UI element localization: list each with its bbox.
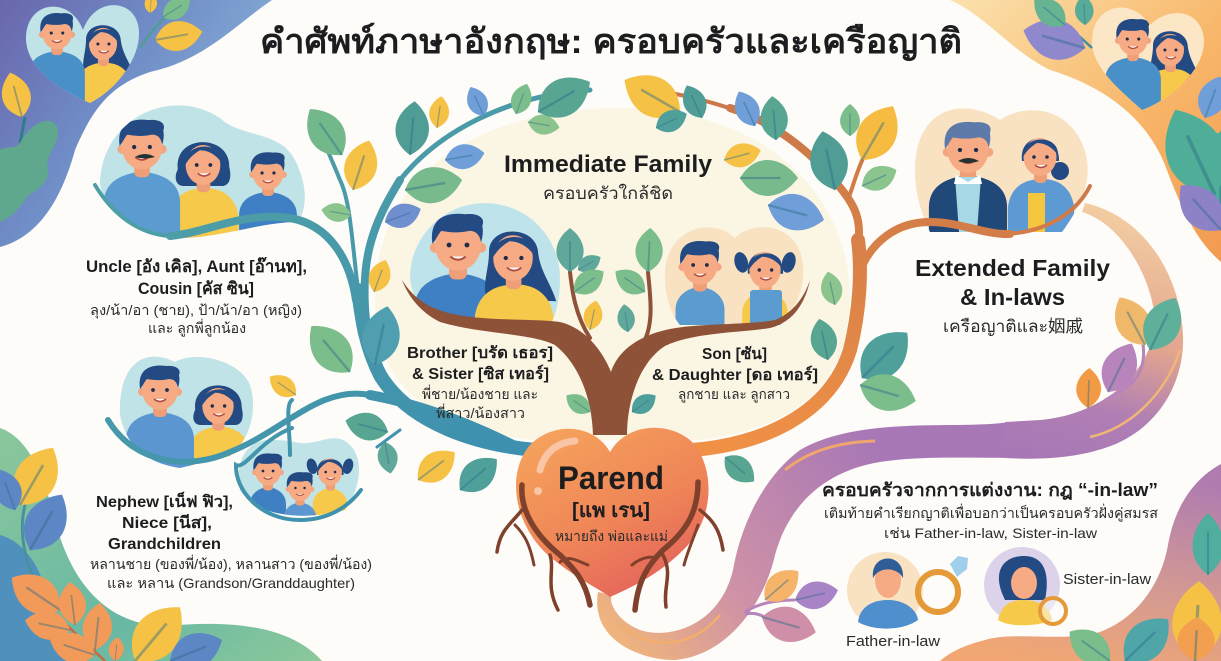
portrait: grandchildren trio bbox=[238, 438, 359, 516]
text block: brother and sister: พี่สาว/น้องสาว bbox=[436, 404, 525, 421]
text block: son and daughter: Son [ซัน] bbox=[702, 345, 767, 363]
leaves: corner sprig top right bbox=[1018, 0, 1221, 242]
text block: brother and sister: & Sister [ซิส เทอร์] bbox=[412, 364, 549, 383]
tree trunk: brown bbox=[402, 272, 810, 435]
text block: in-law rule: เช่น Father-in-law, Sister-in-law bbox=[884, 525, 1098, 541]
portrait: uncle, aunt and cousin bbox=[100, 105, 305, 238]
text block: immediate family bbox=[504, 151, 713, 203]
tree branch: orange, right bbox=[640, 88, 1090, 450]
heart text bbox=[555, 460, 668, 544]
text block: son and daughter bbox=[652, 345, 818, 403]
heart text: [แพ เรน] bbox=[572, 500, 650, 522]
portrait: extended family couple bbox=[915, 108, 1088, 232]
text block: nephew niece grandchildren: Niece [นีส], bbox=[122, 513, 212, 532]
text block: in-law rule: ครอบครัวจากการแต่งงาน: กฎ “-in-law” bbox=[822, 480, 1158, 500]
leaves: ribbon sprigs bbox=[745, 289, 1192, 649]
text block: nephew niece grandchildren bbox=[90, 490, 372, 591]
leaves: corner sprig top left bbox=[0, 0, 205, 222]
text block: brother and sister: Brother [บรัด เธอร] bbox=[407, 344, 553, 362]
heart: parent bbox=[516, 428, 709, 597]
leaves: corner sprig bottom right bbox=[1060, 513, 1221, 661]
in-law examples: father bbox=[847, 552, 968, 629]
ribbon: in-law swoosh bbox=[597, 203, 1183, 660]
text block: uncle aunt cousin bbox=[86, 257, 307, 337]
text block: nephew niece grandchildren: Nephew [เน็ฟ ฟิว], bbox=[96, 490, 233, 511]
leaves: corner sprig bottom left bbox=[0, 438, 228, 661]
text block: extended family bbox=[915, 255, 1110, 336]
background blob: bottom right bbox=[940, 464, 1221, 661]
heart text: หมายถึง พ่อและแม่ bbox=[555, 528, 668, 544]
portrait: couple top right bbox=[1092, 8, 1204, 110]
text block: in-law rule bbox=[822, 480, 1158, 541]
label: sister-in-law: Sister-in-law bbox=[1063, 571, 1151, 588]
portrait: nephew and niece adults bbox=[120, 356, 253, 468]
cream panel behind immediate family bbox=[375, 108, 850, 440]
text block: brother and sister bbox=[407, 344, 553, 421]
text block: uncle aunt cousin: Uncle [อัง เคิล], Aunt [อ๊านท], bbox=[86, 257, 307, 276]
text block: nephew niece grandchildren: และ หลาน (Grandson/Granddaughter) bbox=[107, 575, 355, 591]
background blob: bottom left bbox=[0, 428, 322, 661]
label: father-in-law: Father-in-law bbox=[846, 633, 940, 650]
text block: son and daughter: ลูกชาย และ ลูกสาว bbox=[678, 386, 790, 403]
background blob: top left bbox=[0, 0, 272, 247]
heart text: Parend bbox=[558, 460, 664, 496]
leaves: upper right canopy bbox=[615, 63, 910, 237]
title: คำศัพท์ภาษาอังกฤษ: ครอบครัวและเครือญาติ bbox=[260, 22, 962, 62]
text block: son and daughter: & Daughter [ดอ เทอร์] bbox=[652, 365, 818, 384]
portrait: couple top left bbox=[26, 5, 139, 103]
leaves: upper left canopy bbox=[296, 66, 599, 233]
text block: immediate family: ครอบครัวใกล้ชิด bbox=[543, 183, 673, 203]
in-law examples: sister bbox=[984, 547, 1066, 625]
tree branch: teal, upper left bbox=[95, 90, 590, 520]
text block: nephew niece grandchildren: หลานชาย (ของพี่/น้อง), หลานสาว (ของพี่/น้อง) bbox=[90, 555, 372, 572]
text block: immediate family: Immediate Family bbox=[504, 151, 713, 178]
text block: nephew niece grandchildren: Grandchildren bbox=[108, 536, 221, 553]
portrait: brother and sister bbox=[410, 203, 560, 322]
text block: extended family: & In-laws bbox=[960, 284, 1065, 310]
text block: in-law rule: เติมท้ายคำเรียกญาติเพื่อบอกว่าเป็นครอบครัวฝั่งคู่สมรส bbox=[824, 504, 1158, 522]
text block: uncle aunt cousin: ลุง/น้า/อา (ชาย), ป้า/น้า/อา (หญิง) bbox=[90, 302, 302, 319]
background blob: top right bbox=[950, 0, 1221, 262]
roots bbox=[497, 482, 723, 610]
text block: brother and sister: พี่ชาย/น้องชาย และ bbox=[422, 385, 538, 402]
text block: extended family: เครือญาติและ姻戚 bbox=[943, 317, 1083, 336]
text block: uncle aunt cousin: Cousin [คัส ซิน] bbox=[138, 279, 254, 298]
portrait: son and daughter bbox=[665, 227, 804, 325]
text block: uncle aunt cousin: และ ลูกพี่ลูกน้อง bbox=[148, 319, 246, 337]
text block: extended family: Extended Family bbox=[915, 255, 1110, 281]
leaves: inner tree bbox=[264, 227, 921, 501]
